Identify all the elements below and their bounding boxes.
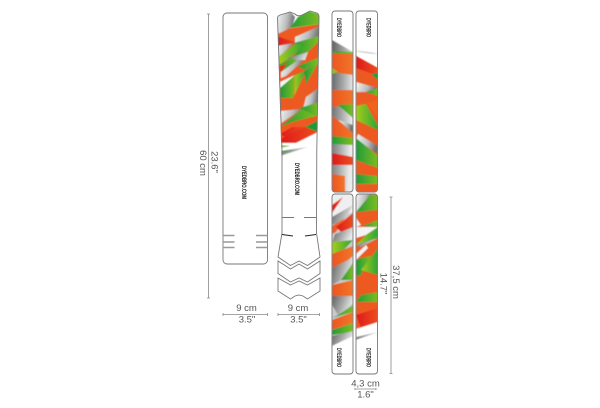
slots: printed mudguard <box>282 216 316 218</box>
label: 9 cm: 9 cm <box>236 303 257 314</box>
dimension: printed mudguard width <box>278 303 320 326</box>
label: 1.6 inches: 1.6" <box>357 390 374 400</box>
artwork: strip top left <box>332 40 353 192</box>
panel: strip bottom left <box>332 194 353 374</box>
outline: tail section <box>278 278 320 299</box>
logo: printed mudguard: DYEDBRO.COM <box>293 163 300 195</box>
outline: plain template <box>223 13 268 264</box>
dimension: plain template width <box>223 303 268 326</box>
logo: strip bottom left: DYEDBRO <box>335 348 342 367</box>
artwork: strip bottom left <box>332 194 353 346</box>
label: 14.7 inches: 14.7" <box>378 273 389 294</box>
dimension: strip length <box>378 197 401 374</box>
dimension line: strip length <box>390 197 392 374</box>
label: 37,5 cm: 37,5 cm <box>390 265 401 299</box>
dimension: total height <box>197 14 220 298</box>
outline: printed mudguard <box>278 11 320 266</box>
outline: strip top right <box>356 11 378 192</box>
artwork: strip bottom right <box>356 194 378 340</box>
printed artwork: mudguard <box>277 11 320 160</box>
logo: plain template: DYEDBRO.COM <box>240 166 247 199</box>
outline: strip bottom right <box>356 194 378 374</box>
dimension line: strip width <box>355 388 376 390</box>
label: 9 cm: 9 cm <box>288 303 308 314</box>
outline: lower section <box>278 261 320 282</box>
panel: plain mudguard template <box>223 13 268 264</box>
outline: strip bottom left <box>332 194 353 374</box>
dimension line: printed width <box>278 313 320 316</box>
label: 3.5 inches: 3.5" <box>290 314 307 326</box>
label: 23.6 inches: 23.6" <box>209 151 220 173</box>
slots: left <box>223 236 234 248</box>
label: 4,3 cm: 4,3 cm <box>351 378 380 390</box>
label: 3.5 inches: 3.5" <box>239 314 255 326</box>
label: 60 cm: 60 cm <box>197 150 208 176</box>
dimension: strip width <box>351 378 380 400</box>
logo: strip bottom right: DYEDBRO <box>365 348 372 367</box>
panel: printed mudguard <box>277 11 320 299</box>
lower slots: printed mudguard <box>282 234 316 236</box>
panel: strip top right <box>356 11 378 192</box>
dimension line: plain width <box>223 313 268 316</box>
panel: strip top left <box>332 11 353 192</box>
dimension line: height <box>207 14 210 298</box>
logo: strip top right: DYEDBRO <box>365 18 372 37</box>
outline: strip top left <box>332 11 353 192</box>
artwork: strip top right <box>356 50 378 192</box>
panel: strip bottom right <box>356 194 378 374</box>
slots: right <box>256 236 268 248</box>
logo: strip top left: DYEDBRO <box>335 18 342 37</box>
